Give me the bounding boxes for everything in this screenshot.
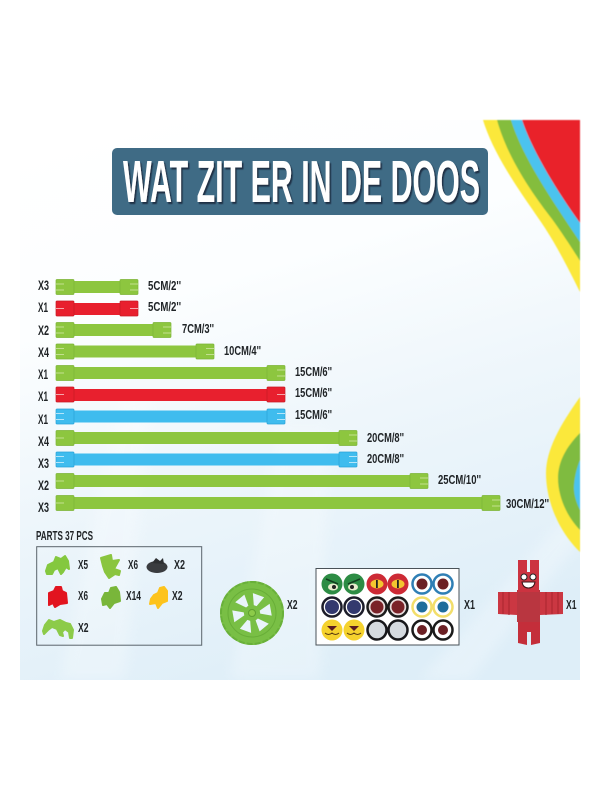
- part: black base x2: X2: [174, 557, 185, 572]
- robot legs: [518, 618, 540, 645]
- wheel window cut-outs: [232, 593, 272, 633]
- part: long green connector x2: X2: [78, 620, 88, 635]
- strip row 7: 15cm blue: 15CM/6'': [295, 407, 332, 422]
- part: green connector x6: [101, 555, 138, 578]
- sticker sheet quantity: X1: [464, 597, 475, 612]
- strip row 6: 15cm red: [38, 385, 332, 404]
- robot quantity: X1: [566, 597, 576, 612]
- title banner: [112, 148, 488, 215]
- background panel: [20, 243, 580, 680]
- strip row 5: 15cm green: [38, 364, 332, 382]
- lower right rainbow swoosh: [546, 397, 580, 552]
- robot arms: [498, 592, 563, 615]
- stickers: yellow ring blue eyes: [412, 598, 452, 616]
- strip row 10: 25cm green: X2: [38, 477, 49, 493]
- strip row 6: 15cm red: 15CM/6'': [295, 385, 332, 400]
- panel: small parts: [37, 547, 202, 645]
- stickers: yellow animal noses: [322, 620, 364, 640]
- wheel: [220, 581, 284, 645]
- strip row 1: 5cm green: 5CM/2'': [148, 278, 181, 293]
- part: red connector x6: X6: [78, 588, 88, 603]
- stickers: green angry eyes: [322, 574, 364, 594]
- strip row 3: 7cm green: X2: [38, 322, 49, 338]
- strip row 10: 25cm green: [38, 472, 481, 493]
- part: green connector x6: X6: [128, 557, 138, 572]
- strip row 10: 25cm green: 25CM/10'': [438, 472, 481, 487]
- robot face: [521, 574, 536, 588]
- part: black base x2: [146, 557, 185, 573]
- strip row 8: 20cm green: X4: [38, 433, 49, 449]
- robot head and ears: [518, 560, 539, 592]
- strip row 6: 15cm red: X1: [38, 388, 48, 404]
- strip row 5: 15cm green: X1: [38, 366, 48, 382]
- part: green connector x14: [102, 587, 141, 608]
- strip row 3: 7cm green: [38, 321, 214, 338]
- strip row 9: 20cm blue: [38, 451, 404, 471]
- strip row 8: 20cm green: 20CM/8'': [367, 430, 404, 445]
- part: long green connector x2: [43, 620, 88, 638]
- part: green connector x5: X5: [78, 557, 88, 572]
- assembled red robot: [498, 560, 563, 645]
- strip row 4: 10cm green: 10CM/4'': [224, 343, 261, 358]
- strip row 5: 15cm green: 15CM/6'': [295, 364, 332, 379]
- stickers: navy eyes: [322, 598, 364, 616]
- part: red connector x6: [49, 587, 88, 607]
- strip row 4: 10cm green: X4: [38, 344, 49, 360]
- panel: sticker sheet: [316, 568, 459, 645]
- stickers: silver eyes: [368, 620, 408, 640]
- stickers: red cat eyes: [366, 574, 408, 594]
- stickers: white and maroon eyes: [412, 620, 452, 640]
- strip row 2: 5cm red: X1: [38, 299, 48, 315]
- strip row 3: 7cm green: 7CM/3'': [182, 321, 214, 336]
- stickers: blue ring eyes: [412, 574, 452, 594]
- strip row 11: 30cm green: 30CM/12'': [506, 496, 549, 511]
- strip row 2: 5cm red: [38, 299, 181, 316]
- part: green connector x14: X14: [126, 588, 141, 603]
- strip row 1: 5cm green: X3: [38, 277, 49, 293]
- strip row 8: 20cm green: [38, 430, 404, 449]
- part: green connector x5: [46, 556, 88, 574]
- strip row 1: 5cm green: [38, 277, 181, 294]
- strip row 4: 10cm green: [38, 343, 261, 360]
- top right rainbow swoosh: [483, 120, 580, 292]
- wheel quantity: X2: [287, 597, 298, 612]
- strip row 11: 30cm green: [38, 496, 549, 515]
- part: yellow connector x2: X2: [172, 588, 182, 603]
- part: yellow connector x2: [150, 587, 182, 608]
- strip row 9: 20cm blue: X3: [38, 455, 49, 471]
- strip row 9: 20cm blue: 20CM/8'': [367, 451, 404, 466]
- strip row 7: 15cm blue: X1: [38, 411, 48, 427]
- strip row 7: 15cm blue: [38, 407, 332, 427]
- parts heading: PARTS 37 PCS: [36, 528, 93, 543]
- strip row 2: 5cm red: 5CM/2'': [148, 299, 181, 314]
- robot body: [517, 590, 540, 622]
- strip row 11: 30cm green: X3: [38, 499, 49, 515]
- stickers: dark red eyes: [368, 598, 408, 616]
